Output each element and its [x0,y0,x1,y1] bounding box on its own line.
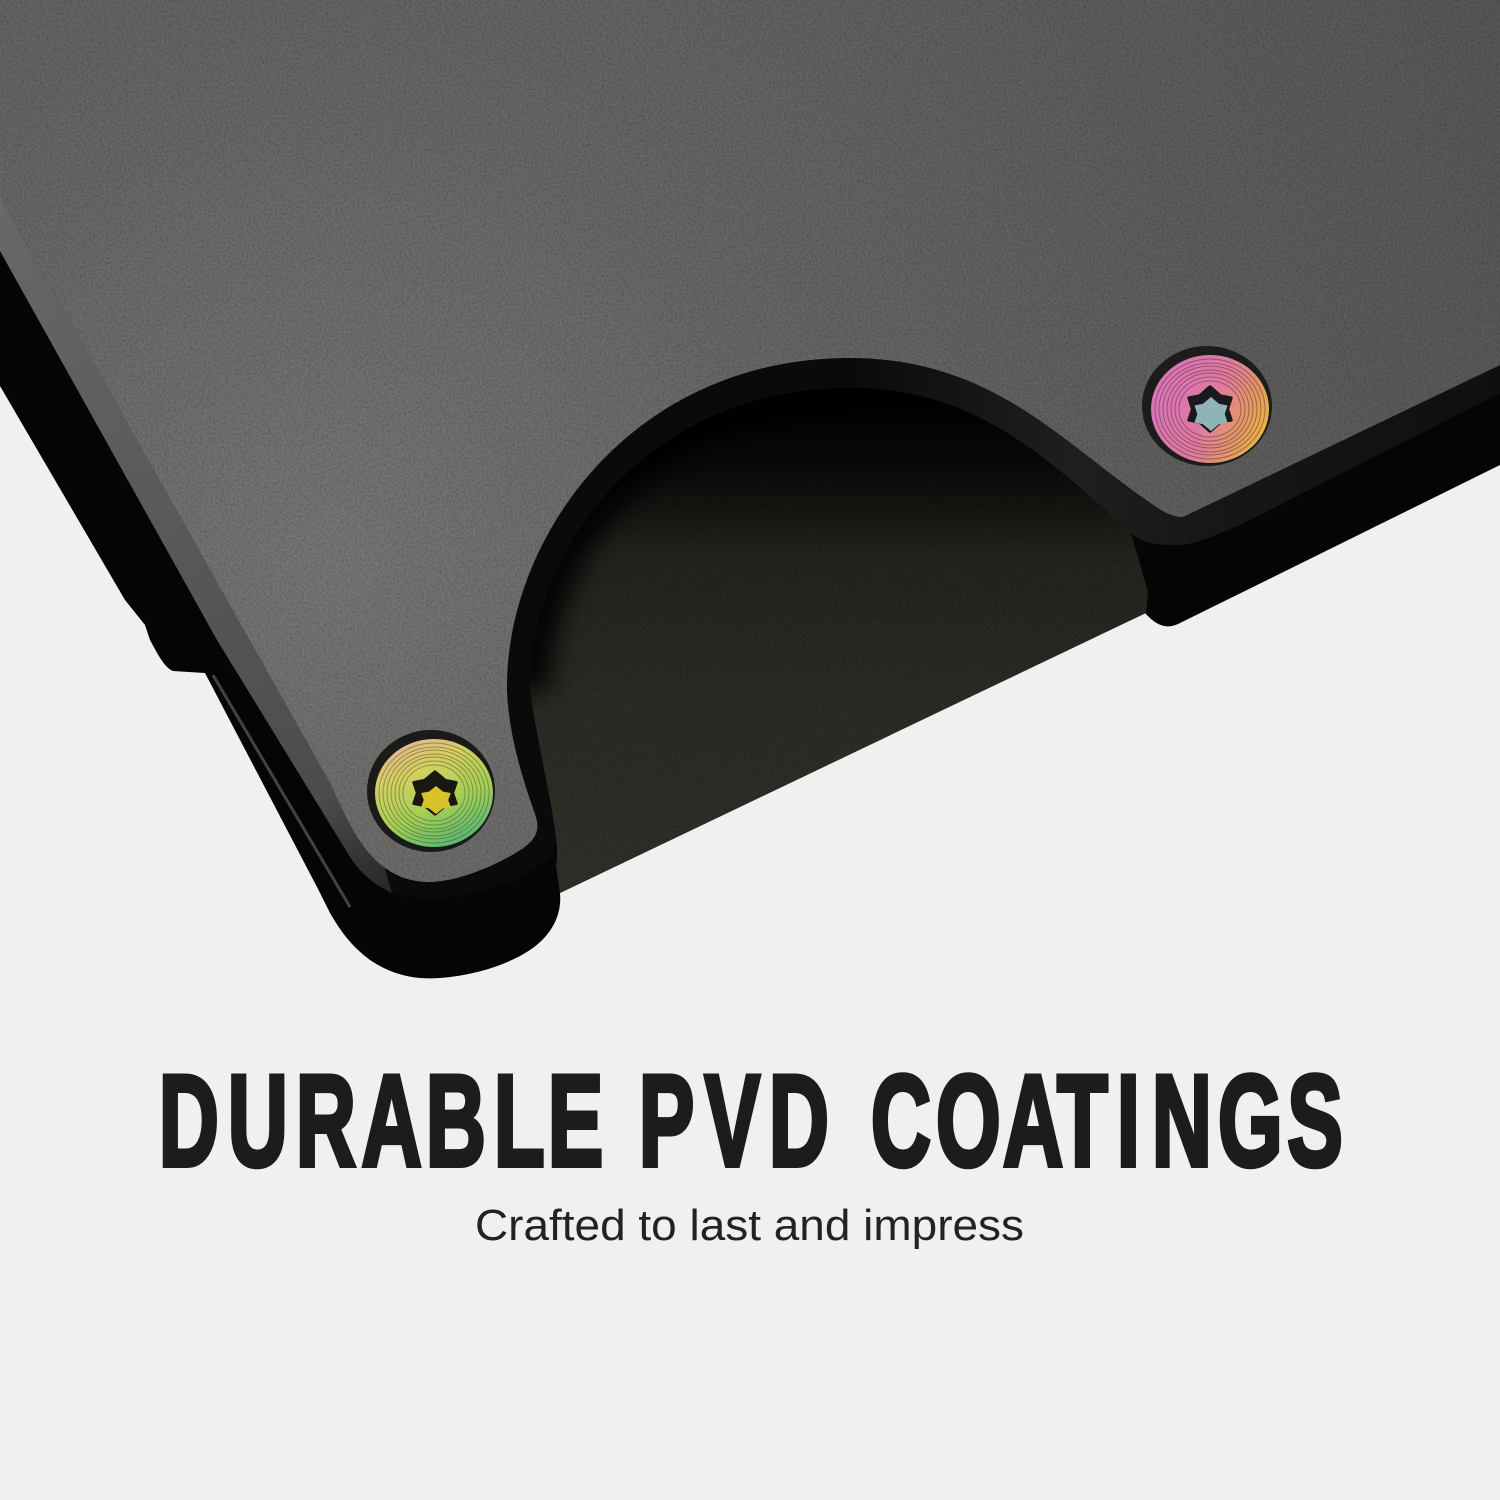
left bevel edge [0,197,392,893]
textured top plate [0,0,1500,900]
wallet black silhouette with fabric strap [0,200,1500,978]
card slot streak under the plate [213,675,350,907]
icon: pink PVD torx screw [1142,346,1272,466]
subtitle: Crafted to last and impress [475,1201,1024,1250]
icon: green PVD torx screw [367,730,495,852]
title: DURABLE PVD COATINGS [159,1049,1343,1194]
wallet product photo [0,0,1500,978]
card pocket floor [530,481,1148,893]
bottom and cutout black bevel [385,200,1500,898]
